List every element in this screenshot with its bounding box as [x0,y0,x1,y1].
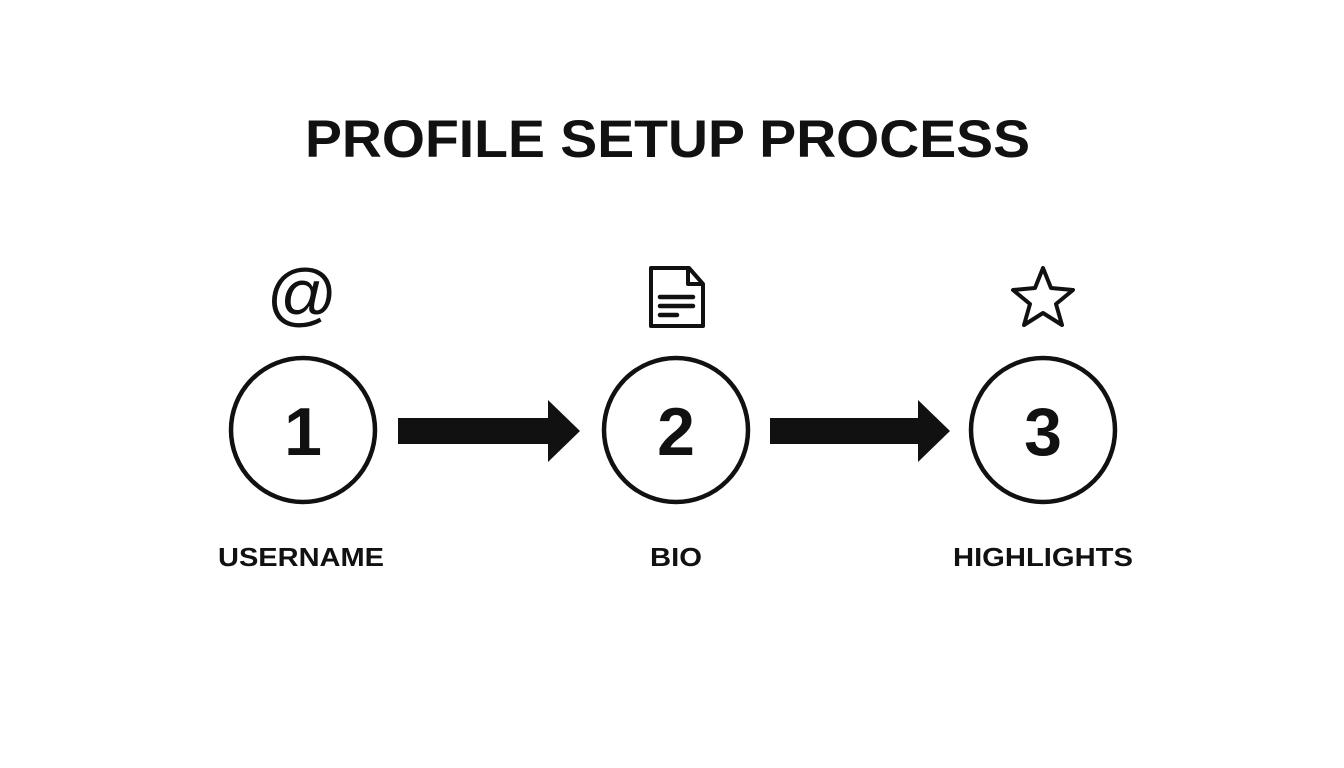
title: PROFILE SETUP PROCESS [305,110,1030,169]
icon: at sign: @ [266,255,338,333]
label: highlights: HIGHLIGHTS [953,542,1133,572]
label: username: USERNAME [218,542,384,572]
icon: document [651,268,703,326]
label: bio: BIO [650,542,702,572]
arrow 2 [770,400,950,462]
step 3 circle [971,358,1115,502]
step 2 circle [604,358,748,502]
step 1 circle: 1 [284,394,322,470]
step 2 circle: 2 [657,394,695,470]
icon: star [1013,268,1073,325]
step 1 circle [231,358,375,502]
arrow 1 [398,400,580,462]
step 3 circle: 3 [1024,394,1062,470]
